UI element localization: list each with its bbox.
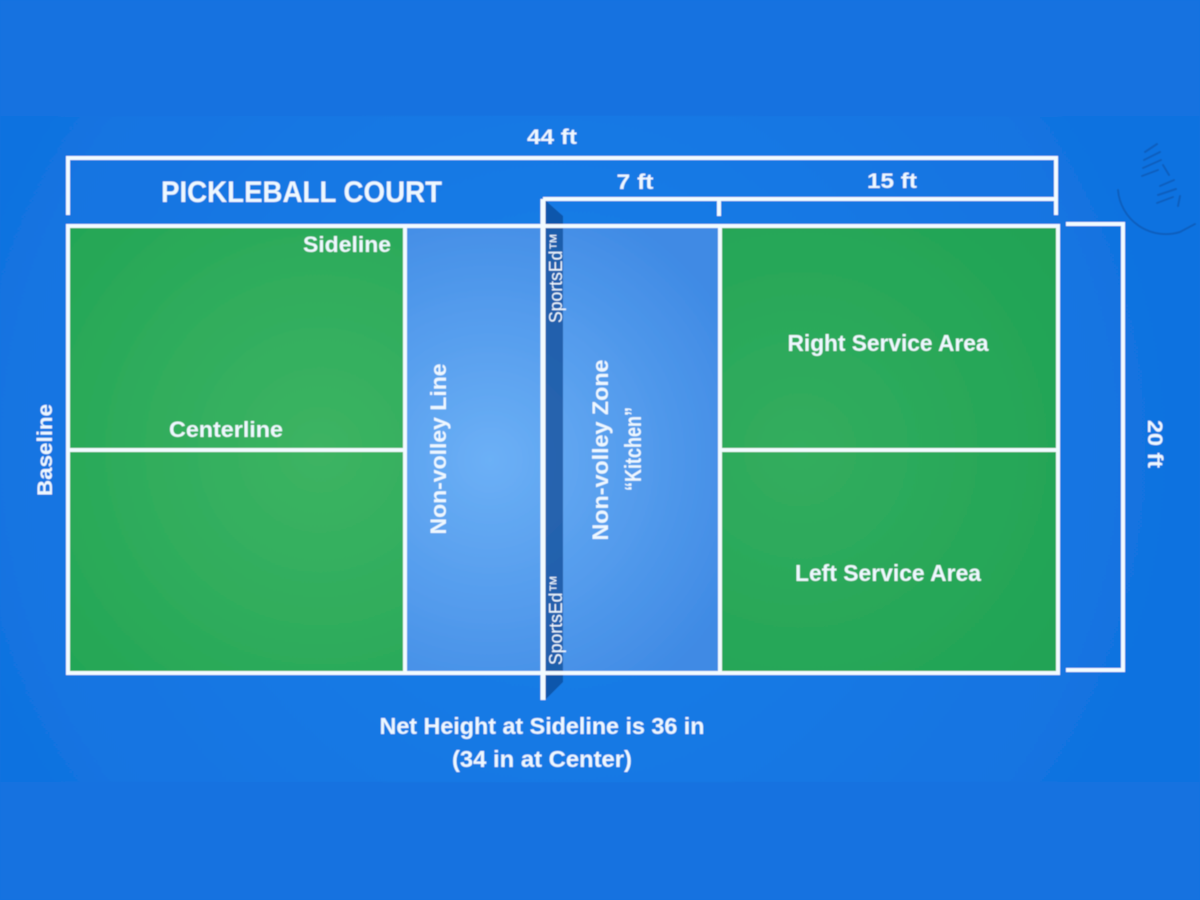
label: Non-volley Zone Kitchen: [588, 360, 646, 540]
net line: [540, 199, 546, 700]
label: 15 ft: 15 ft: [867, 170, 917, 193]
label: 20 ft: 20 ft: [1143, 420, 1166, 468]
caption: net height: [380, 713, 704, 772]
net branding: bottom: SportsEd™: [546, 575, 566, 665]
net branding: top: SportsEd™: [546, 233, 566, 323]
label: Sideline: Sideline: [303, 232, 391, 257]
label: Non-volley Line: Non-volley Line: [426, 364, 451, 534]
label: 44 ft: 44 ft: [527, 126, 577, 149]
label: Left Service Area: Left Service Area: [795, 560, 981, 586]
caption: net height: (34 in at Center): [452, 746, 632, 772]
background band: [0, 116, 1200, 782]
label: 7 ft: 7 ft: [616, 171, 654, 194]
court lines: [68, 226, 1058, 673]
panel: right green court: [720, 226, 1058, 673]
caption: net height: Net Height at Sideline is 36 in: [380, 713, 704, 739]
panel: non-volley zones: [405, 226, 720, 673]
label: Baseline: Baseline: [34, 404, 57, 496]
dimension bracket: 44 ft: [68, 158, 1056, 215]
label: Non-volley Zone Kitchen: Non-volley Zone: [588, 360, 613, 540]
label: Right Service Area: Right Service Area: [788, 330, 989, 356]
title: PICKLEBALL COURT: [161, 176, 442, 209]
label: Non-volley Zone Kitchen: “Kitchen”: [620, 407, 646, 491]
dimension bracket: 20 ft: [1066, 224, 1123, 670]
net shadow: [545, 200, 563, 700]
icon: faint watermark logo: [1118, 144, 1195, 234]
dimension bracket: 7 ft and 15 ft: [543, 199, 1056, 216]
court surface: [68, 226, 1058, 673]
label: Centerline: Centerline: [169, 417, 283, 442]
panel: left green court: [68, 226, 405, 673]
